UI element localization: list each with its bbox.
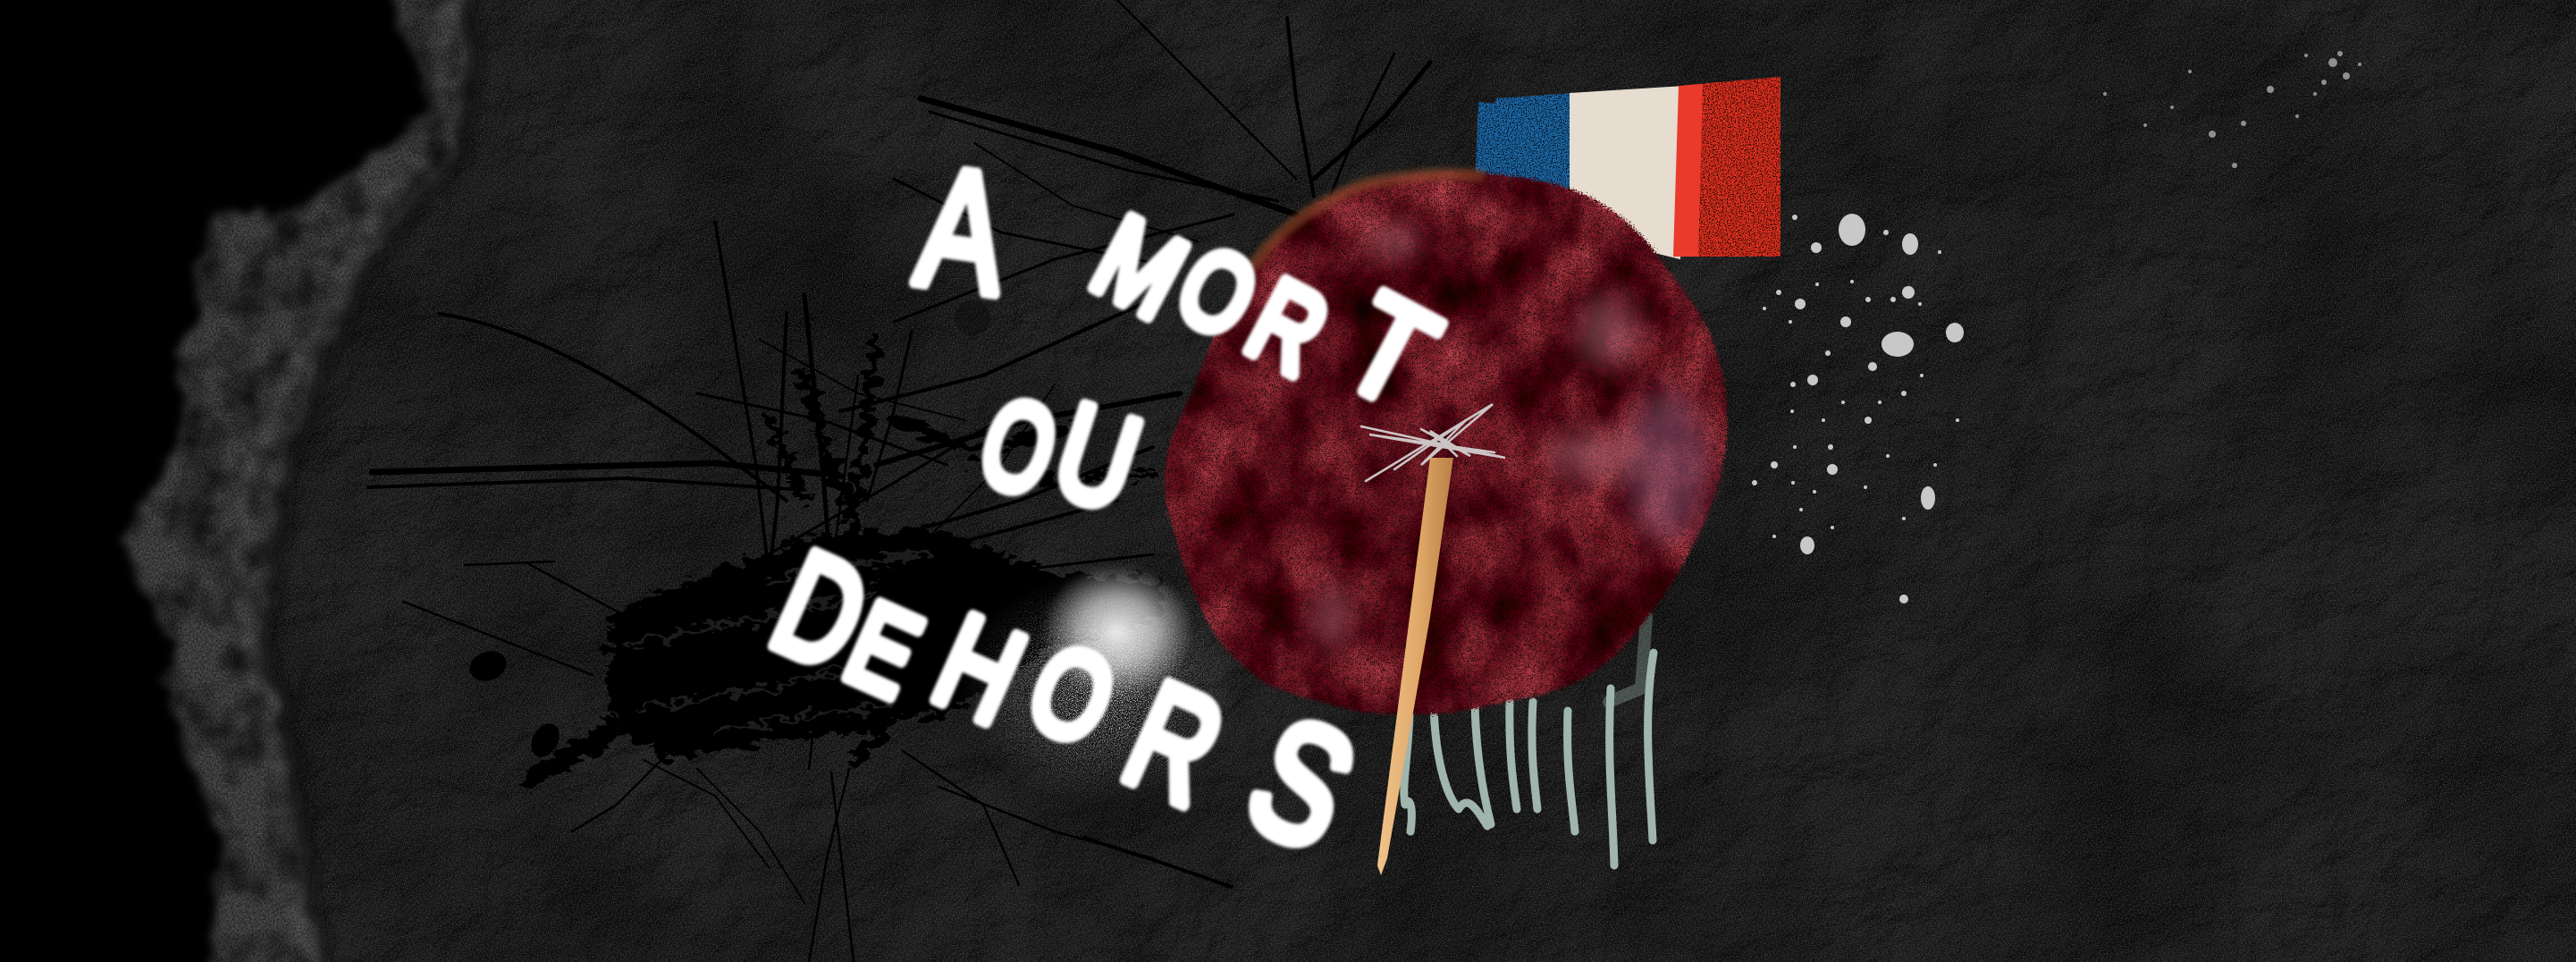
torn paper edge (121, 0, 476, 962)
salami brown rim (1251, 174, 1484, 268)
line: DEHORS: S (1225, 681, 1378, 886)
line: DEHORS: D (752, 519, 890, 702)
french flag (1475, 77, 1780, 259)
line: A MORT: T (1320, 264, 1460, 438)
faint dust top right (2103, 51, 2361, 168)
line: DEHORS: O (1010, 618, 1133, 772)
ink blot mass (466, 300, 1162, 780)
salami pale fat highlight (1314, 225, 1707, 648)
line: OU: U (1040, 376, 1156, 540)
thread scribble (1361, 404, 1505, 481)
line: A MORT: R (1229, 254, 1347, 400)
black left void (0, 0, 422, 962)
flag red stripe (1673, 77, 1780, 257)
flag white stripe (1570, 86, 1684, 259)
line: A MORT (908, 131, 1460, 438)
line: A MORT: M (1074, 192, 1205, 343)
line: A MORT: A (908, 131, 1017, 330)
line: DEHORS (752, 519, 1378, 886)
line: OU (965, 371, 1156, 540)
line: A MORT: O (1159, 223, 1275, 362)
flag blue stripe (1475, 93, 1577, 232)
white speckles right of salami (1752, 214, 1964, 603)
line: DEHORS: H (915, 586, 1043, 752)
toothpick (1377, 458, 1453, 875)
white spray patch (956, 564, 1242, 805)
line: DEHORS: R (1103, 649, 1246, 838)
paint drips (1404, 617, 1654, 865)
ink scribbles (368, 0, 1430, 962)
salami slice (1165, 172, 1727, 714)
line: DEHORS: E (829, 577, 939, 722)
line: OU: O (965, 371, 1072, 523)
title text (752, 131, 1460, 886)
